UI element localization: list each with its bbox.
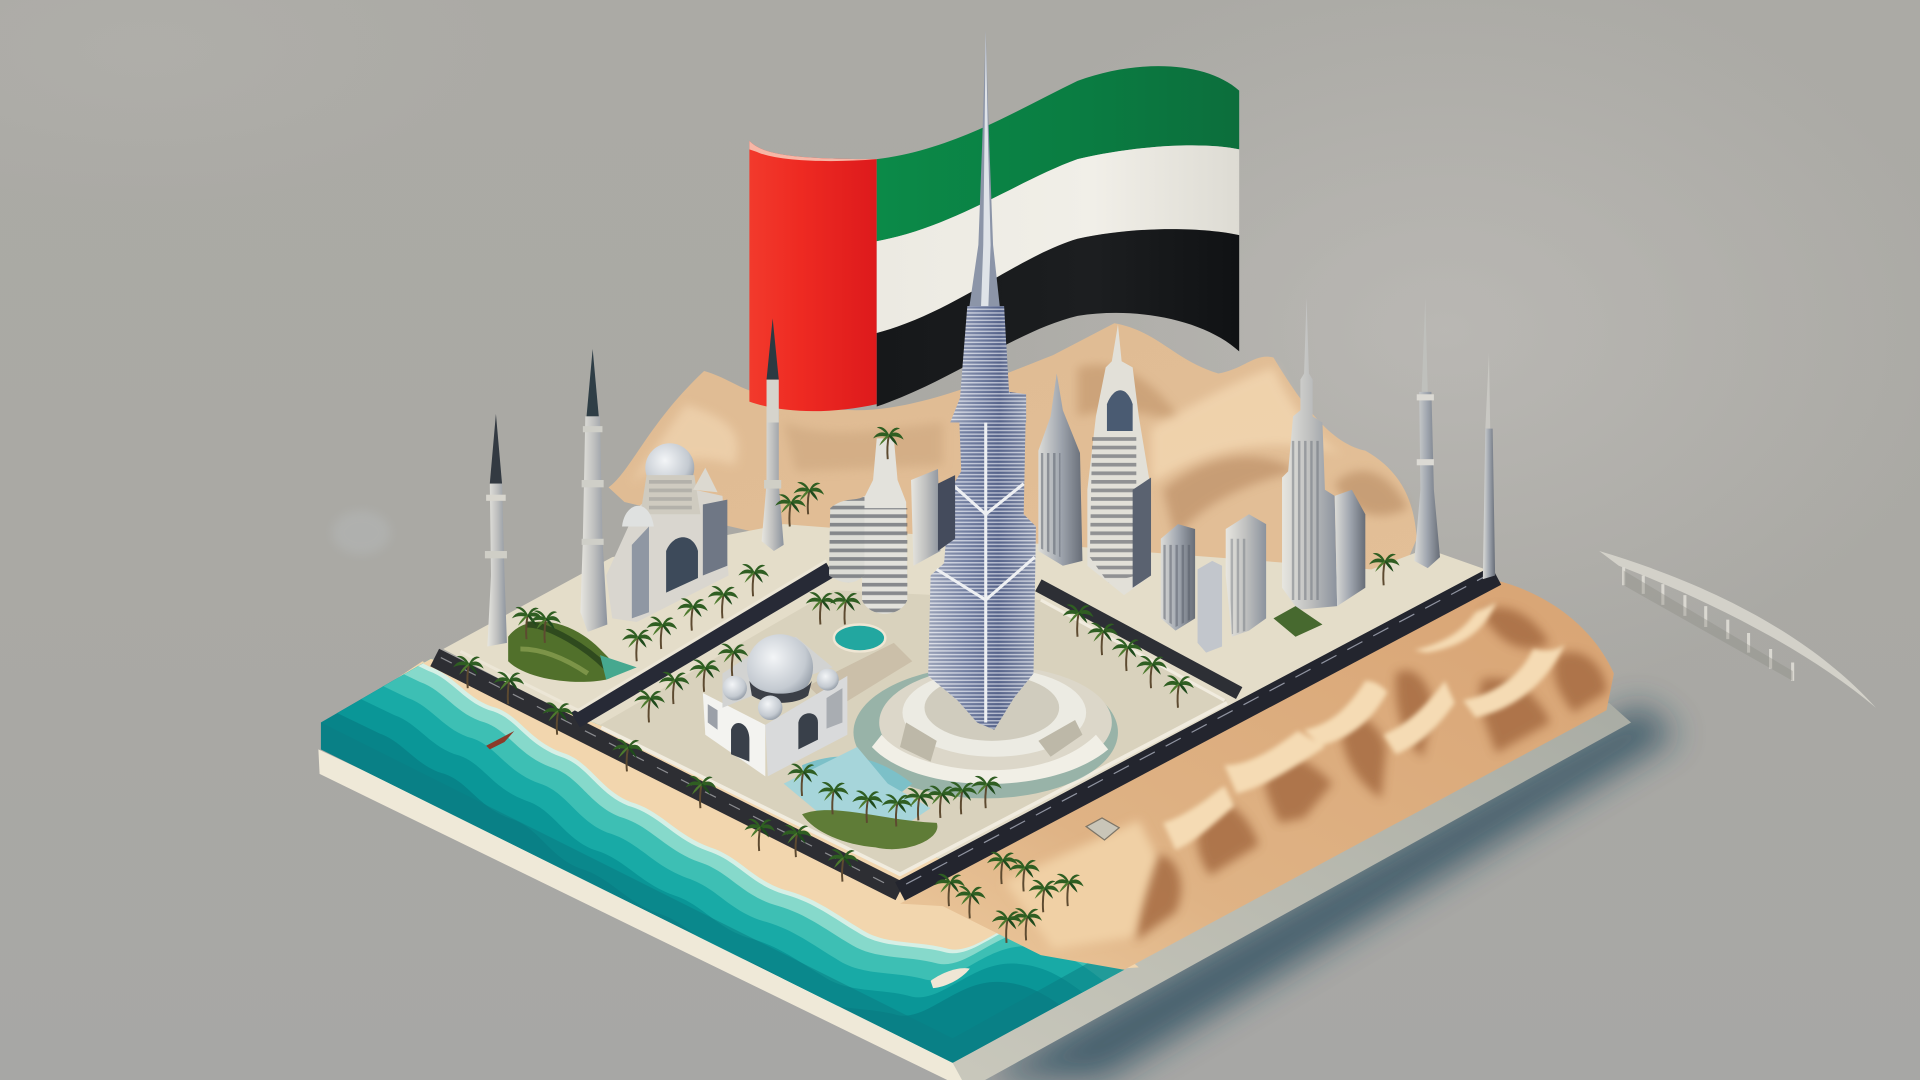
road: inner diagonal right [1038, 585, 1239, 693]
back dunes [609, 323, 1417, 588]
dune sunlit crests [1163, 602, 1565, 850]
slab tower [911, 469, 940, 566]
small domes [622, 506, 654, 527]
flag red band [749, 141, 877, 411]
flag green band [877, 66, 1239, 241]
pool [834, 624, 885, 651]
sea with waves [320, 658, 1124, 1063]
front mosque [703, 634, 847, 776]
drop shadow of the platform [980, 704, 1678, 1080]
road: coastal [435, 658, 900, 891]
dome [645, 443, 694, 492]
back mosque [606, 443, 729, 622]
flag black band [877, 229, 1239, 407]
paved promenade [808, 643, 912, 710]
main dome [747, 634, 813, 700]
platform right side [953, 703, 1631, 1080]
podium plaza of the tower [802, 666, 1118, 808]
minaret 4 [1414, 298, 1440, 568]
minaret 2 [580, 349, 607, 632]
central block ground [600, 590, 1227, 874]
dark slab [938, 475, 955, 551]
distant curved bridge [1599, 551, 1876, 708]
beach [367, 661, 1139, 980]
garden lagoon [784, 747, 931, 833]
twisted tower tall [862, 438, 907, 614]
sand overlay inland of the shore [423, 658, 997, 950]
ornate tower [1087, 324, 1151, 595]
minarets [485, 298, 1495, 647]
pale dune field near the beach [1004, 820, 1157, 949]
dune shaded faces [1136, 607, 1607, 940]
palm garden by left minaret [508, 607, 637, 682]
minaret 1 [485, 414, 507, 647]
flag white band [877, 145, 1239, 333]
small desert building [1086, 818, 1119, 840]
road: desert side [900, 576, 1496, 891]
arches [731, 723, 749, 762]
UAE flag [749, 66, 1239, 411]
side domes [722, 676, 747, 700]
grey tower with spike [1038, 373, 1082, 566]
flag curled lip [749, 141, 877, 161]
palm trees [453, 427, 1400, 943]
desert with dunes [900, 581, 1614, 970]
twisted tower short [829, 496, 864, 583]
platform base [318, 703, 1631, 1080]
garden greenery [802, 810, 937, 849]
sailing boat [486, 731, 514, 749]
minaret 3 spire over flag [767, 318, 779, 422]
curbs and lane marks [441, 561, 1491, 888]
platform left side [318, 749, 967, 1080]
green garden patch [1273, 606, 1322, 637]
setback ribs [937, 392, 1035, 722]
road: inner diagonal left [576, 569, 830, 720]
roads [435, 561, 1496, 891]
Burj Khalifa upper spire over flag [950, 31, 1026, 422]
city ground [443, 524, 1489, 891]
isometric UAE diorama illustration [318, 32, 1876, 1080]
portal [666, 537, 698, 593]
tall needle tower [1282, 298, 1365, 610]
minaret 5 [1483, 353, 1495, 579]
motor boat [931, 968, 970, 988]
cluster towers [1161, 514, 1266, 653]
minaret 3 [762, 380, 784, 551]
central skyline towers [829, 298, 1365, 653]
Burj Khalifa tower [928, 306, 1036, 730]
front water face [321, 722, 1124, 1063]
